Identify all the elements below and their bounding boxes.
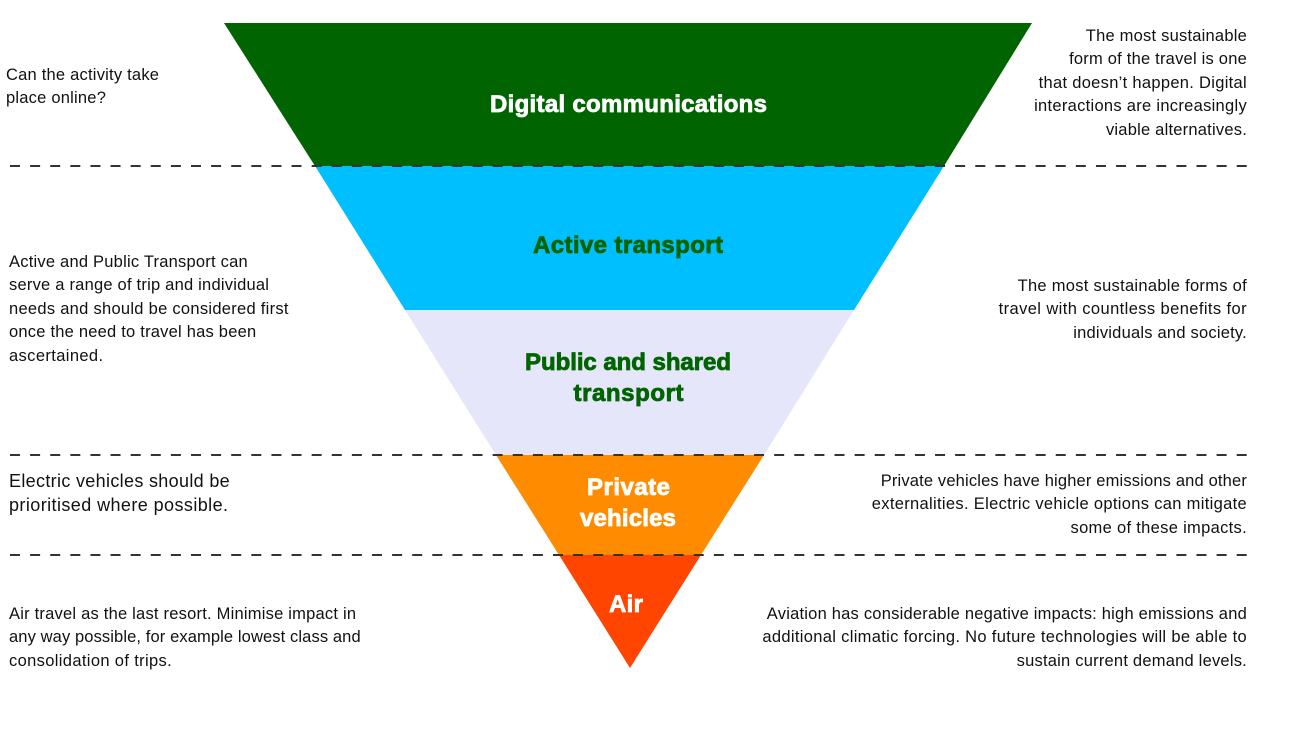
right note: aviation: additional climatic forcing. No future technologies will be able to xyxy=(762,628,1247,646)
right note: active transport: travel with countless benefits for xyxy=(999,300,1247,318)
right note: digital: interactions are increasingly xyxy=(1034,97,1247,115)
left note: digital xyxy=(6,66,159,107)
right note: private vehicles: externalities. Electric vehicle options can mitigate xyxy=(872,495,1247,513)
left note: electric vehicles xyxy=(9,471,230,515)
left note: air travel: any way possible, for example lowest class and xyxy=(9,628,361,646)
right note: digital: form of the travel is one xyxy=(1069,50,1247,68)
left note: active and public transport: needs and should be considered first xyxy=(9,300,289,318)
right note: active transport: The most sustainable forms of xyxy=(1018,277,1247,295)
left note: active and public transport: serve a range of trip and individual xyxy=(9,276,269,294)
left note: electric vehicles: Electric vehicles should be xyxy=(9,471,230,491)
tier: private vehicles xyxy=(496,455,764,555)
right note: private vehicles: Private vehicles have higher emissions and other xyxy=(881,472,1247,490)
left note: active and public transport: once the need to travel has been xyxy=(9,323,256,341)
left note: air travel xyxy=(9,605,361,670)
tier: digital communications xyxy=(224,23,1032,166)
left note: digital: Can the activity take xyxy=(6,66,159,84)
tier: active transport xyxy=(315,166,944,310)
tier: private vehicles: vehicles xyxy=(580,505,676,532)
left note: active and public transport xyxy=(9,253,289,365)
tier: public and shared transport: Public and shared xyxy=(525,349,731,376)
tier: private vehicles: Private xyxy=(587,474,670,501)
right note: digital: that doesn’t happen. Digital xyxy=(1039,74,1247,92)
right note: digital xyxy=(1034,27,1247,139)
right note: active transport xyxy=(998,277,1247,342)
right note: aviation: sustain current demand levels. xyxy=(1017,652,1247,670)
left note: active and public transport: ascertained. xyxy=(9,347,103,365)
right note: digital: viable alternatives. xyxy=(1106,121,1247,139)
tier: active transport: Active transport xyxy=(533,232,723,259)
right note: private vehicles xyxy=(872,472,1247,537)
tier: public and shared transport xyxy=(405,310,854,455)
tier: public and shared transport: transport xyxy=(574,380,684,407)
right note: aviation: Aviation has considerable negative impacts: high emissions and xyxy=(767,605,1247,623)
right note: active transport: individuals and society. xyxy=(1073,324,1247,342)
right note: digital: The most sustainable xyxy=(1086,27,1247,45)
tier: air: Air xyxy=(609,591,643,618)
right note: aviation xyxy=(762,605,1247,670)
right note: private vehicles: some of these impacts. xyxy=(1071,519,1247,537)
tier: digital communications: Digital communications xyxy=(490,91,767,118)
left note: air travel: consolidation of trips. xyxy=(9,652,172,670)
left note: active and public transport: Active and Public Transport can xyxy=(9,253,248,271)
left note: electric vehicles: prioritised where possible. xyxy=(9,495,228,515)
tier: air xyxy=(559,555,701,668)
left note: digital: place online? xyxy=(6,89,106,107)
left note: air travel: Air travel as the last resort. Minimise impact in xyxy=(9,605,356,623)
